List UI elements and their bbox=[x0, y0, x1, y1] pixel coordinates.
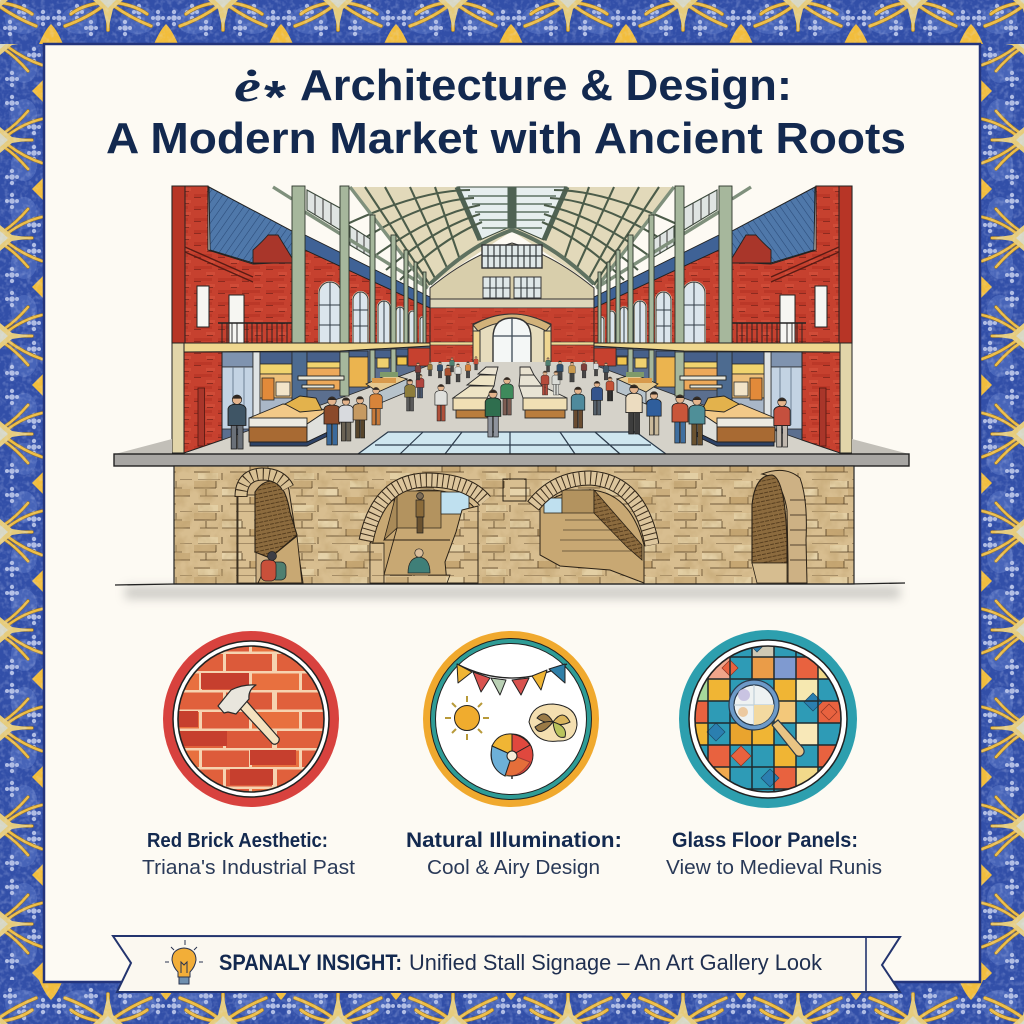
back wall with arched doorway bbox=[430, 308, 594, 370]
market floor bbox=[184, 362, 840, 454]
ribbon text: Unified Stall Signage – An Art Gallery Look bbox=[409, 950, 823, 975]
side wall blue band bbox=[305, 235, 430, 308]
sun bbox=[445, 696, 489, 740]
arch 1 bbox=[237, 469, 303, 583]
pillar stub bbox=[503, 479, 526, 501]
ground line bbox=[115, 583, 905, 585]
icon: natural light and fans bbox=[423, 631, 599, 807]
caption 1 heading: Red Brick Aesthetic: bbox=[147, 830, 328, 852]
arch 2 voussoirs bbox=[366, 480, 485, 541]
gable wall with windows bbox=[430, 243, 594, 308]
arch 4 bbox=[752, 470, 807, 583]
arch 2 bbox=[366, 480, 485, 583]
ribbon bold text: SPANALY INSIGHT: bbox=[219, 950, 402, 975]
bunting bbox=[457, 664, 567, 695]
end wall windows bbox=[197, 286, 244, 343]
title line 2: A Modern Market with Ancient Roots bbox=[106, 114, 906, 163]
skylight bbox=[457, 187, 567, 240]
sage columns bbox=[292, 186, 426, 343]
beige corner column bbox=[172, 343, 184, 453]
standing figure bbox=[416, 493, 424, 533]
arch 3 bbox=[533, 478, 652, 583]
insight ribbon bbox=[113, 936, 900, 992]
clerestory windows bbox=[273, 187, 428, 288]
icon: glass tile floor with magnifier bbox=[679, 630, 857, 808]
arch 1 voussoirs bbox=[241, 474, 288, 497]
shoppers bbox=[228, 357, 790, 449]
cross-section illustration: market hall above medieval ruins bbox=[114, 186, 909, 599]
floor slab bbox=[114, 439, 909, 466]
glass floor panels bbox=[358, 432, 666, 454]
title icon asterisk: * bbox=[264, 71, 286, 123]
captions bbox=[142, 828, 882, 879]
medieval stone foundation bbox=[115, 466, 905, 585]
caption 1 body: Triana's Industrial Past bbox=[142, 856, 355, 879]
ground shadow bbox=[125, 586, 900, 599]
ground floor shop fronts bbox=[222, 346, 430, 440]
title icon glyph: ė bbox=[234, 62, 261, 111]
end wall brick bbox=[172, 186, 292, 343]
caption 3 body: View to Medieval Runis bbox=[666, 856, 882, 879]
figure in arch 1 bbox=[261, 552, 286, 581]
seated figure bbox=[408, 549, 430, 573]
magnifier bbox=[729, 680, 804, 756]
red brick ground floor bbox=[184, 352, 222, 453]
far counter bbox=[366, 372, 407, 404]
caption 2 body: Cool & Airy Design bbox=[427, 856, 600, 879]
centre market islands bbox=[453, 367, 567, 418]
arch 3 voussoirs bbox=[533, 478, 652, 545]
hall roof with skylight bbox=[345, 187, 679, 287]
hammer bbox=[218, 685, 279, 744]
right half of market hall bbox=[594, 186, 852, 453]
mezzanine beam bbox=[184, 343, 430, 352]
side wall brick bbox=[305, 250, 430, 346]
title line 1: Architecture & Design: bbox=[300, 61, 792, 110]
side roof bbox=[209, 187, 292, 263]
title bbox=[106, 61, 906, 163]
pinwheel bbox=[491, 734, 533, 779]
corner pier bbox=[172, 186, 185, 343]
caption 2 heading: Natural Illumination: bbox=[406, 828, 622, 852]
market counter bbox=[249, 376, 344, 446]
cornice bbox=[185, 247, 253, 282]
main arched rib bbox=[430, 230, 594, 284]
arched windows bbox=[319, 282, 425, 343]
dormer bbox=[253, 235, 292, 263]
caption 3 heading: Glass Floor Panels: bbox=[672, 829, 858, 852]
icon: brick and hammer bbox=[163, 631, 339, 807]
icon: light bulb bbox=[165, 940, 203, 984]
balcony railing bbox=[218, 323, 292, 343]
left half of market hall bbox=[172, 186, 430, 453]
fan bbox=[529, 704, 577, 741]
door bbox=[198, 388, 204, 446]
